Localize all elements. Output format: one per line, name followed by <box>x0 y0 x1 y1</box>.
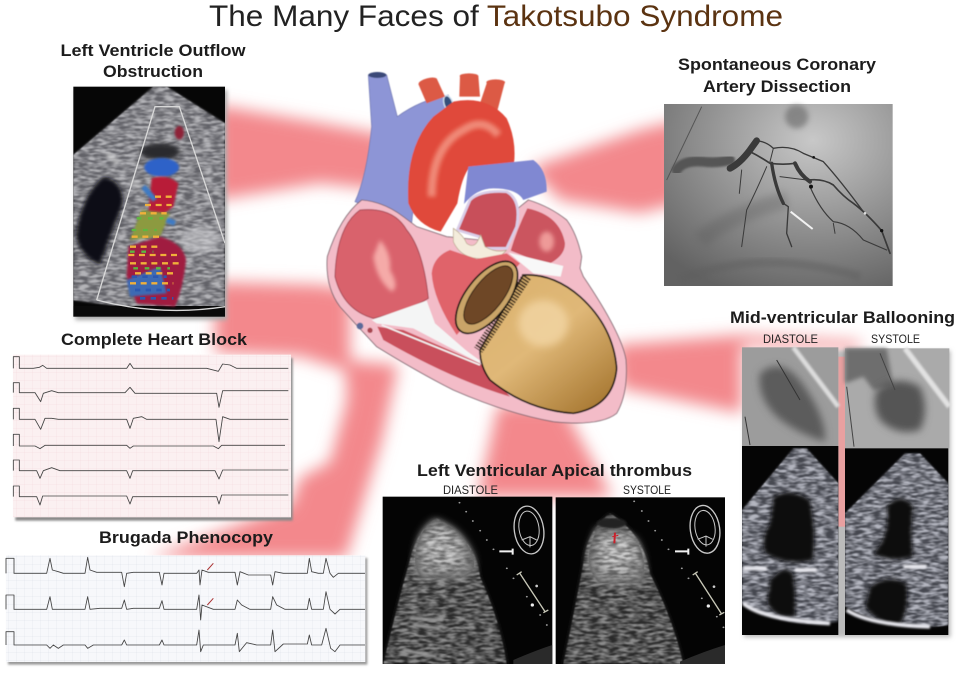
pink connector bands <box>150 105 860 558</box>
diastole angiogram <box>742 347 838 446</box>
pot rim <box>444 251 529 344</box>
rope collar <box>478 277 527 350</box>
label: apical systole: SYSTOLE <box>623 485 671 497</box>
pulmonary artery <box>464 160 547 204</box>
panel: apical echo pair <box>383 497 725 664</box>
left atrium <box>511 208 565 265</box>
lower ventricle chamber <box>377 327 510 397</box>
diastole echo <box>742 446 838 635</box>
aortic outflow chamber <box>457 191 518 248</box>
systole echo <box>845 448 948 635</box>
panel: ECG complete heart block <box>13 355 293 521</box>
heading: left ventricle outflow obstruction: Left Ventricle Outflow <box>60 41 246 60</box>
panel: coronary angiogram <box>664 104 893 286</box>
takotsubo pot <box>444 251 617 413</box>
right atrium <box>335 210 428 318</box>
label: mid-ventricular systole: SYSTOLE <box>871 334 920 346</box>
pot body <box>480 275 617 413</box>
heading: complete heart block: Complete Heart Block <box>61 330 248 349</box>
panel: colour doppler echo of LV outflow <box>73 87 227 320</box>
heart wall <box>327 200 626 423</box>
illustration: heart with takotsubo pot <box>327 72 626 423</box>
systole angiogram <box>845 348 949 448</box>
label: apical diastole: DIASTOLE <box>443 485 498 497</box>
coronary vessels <box>677 141 890 253</box>
pot mouth <box>455 258 521 332</box>
diastole echo <box>383 497 552 664</box>
heading: brugada phenocopy: Brugada Phenocopy <box>99 528 274 547</box>
heading: spontaneous coronary artery dissection: Artery Dissection <box>703 77 851 96</box>
title: The Many Faces of Takotsubo Syndrome <box>209 0 783 33</box>
colour jet <box>127 158 186 307</box>
white arrow <box>791 212 813 229</box>
heading: mid-ventricular ballooning: Mid-ventricular Ballooning <box>730 308 955 327</box>
coronary sinus dots <box>357 323 363 329</box>
heading: left ventricular apical thrombus: Left Ventricular Apical thrombus <box>417 461 692 480</box>
heading: spontaneous coronary artery dissection: Spontaneous Coronary <box>678 55 877 74</box>
aortic valve <box>453 228 507 259</box>
heading: left ventricle outflow obstruction: Obstruction <box>103 62 203 81</box>
superior vena cava <box>355 72 453 223</box>
aortic arch <box>408 100 515 232</box>
aortic branches <box>418 73 505 113</box>
panel: ECG Brugada phenocopy <box>6 555 367 665</box>
systole echo <box>556 497 725 664</box>
right ventricle <box>432 250 520 335</box>
white valve strands <box>372 301 487 368</box>
label: mid-ventricular diastole: DIASTOLE <box>763 334 818 346</box>
panel: mid-ventricular angiograms and echoes <box>742 347 951 637</box>
